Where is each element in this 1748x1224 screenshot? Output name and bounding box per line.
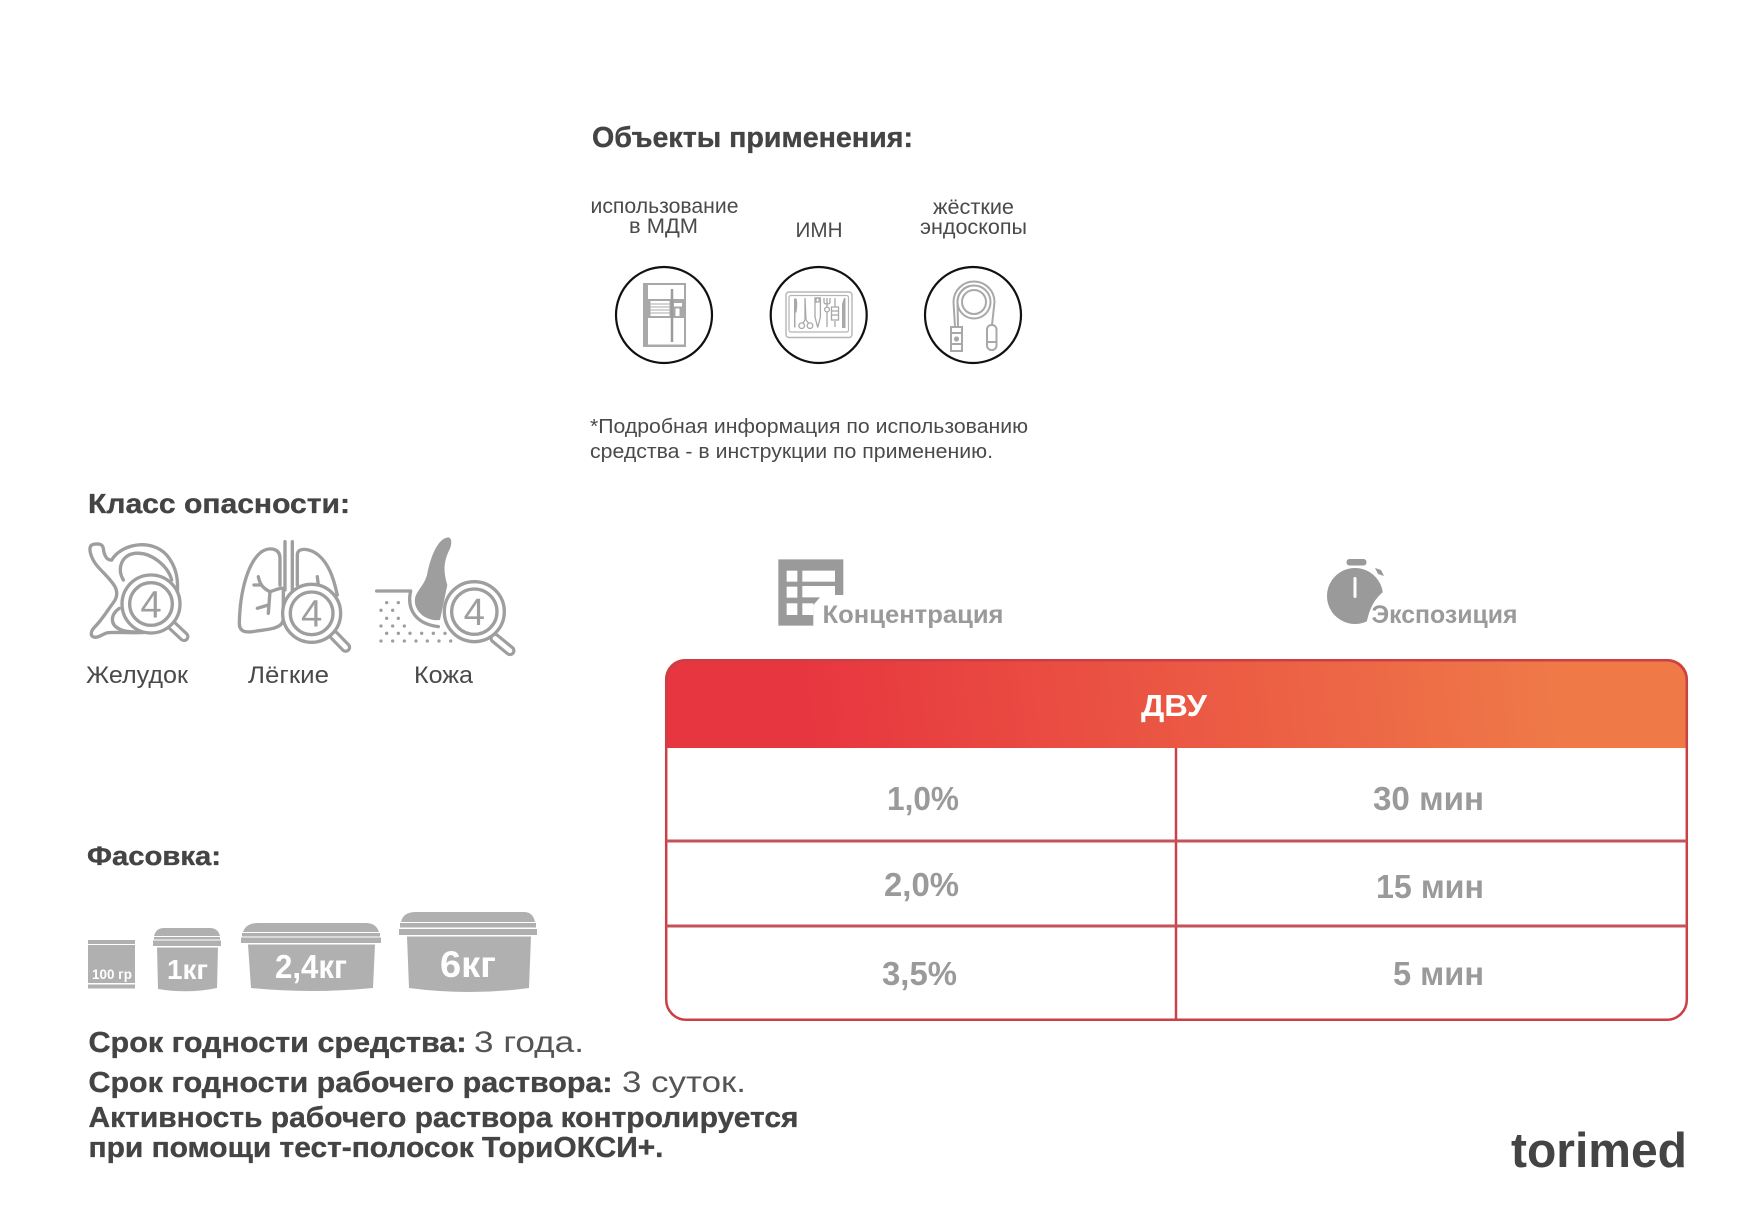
label: MDM use xyxy=(590,195,738,238)
panel: objects of application xyxy=(590,122,1028,463)
icon: lungs with magnifier class 4: 4 xyxy=(301,593,322,636)
text: working solution shelf life: 3 суток. xyxy=(622,1066,746,1099)
footnote: средства - в инструкции по применению. xyxy=(590,440,993,463)
icon: sachet 100 g: 100 гр xyxy=(92,967,132,982)
table: concentration and exposure by DVU xyxy=(665,659,1688,1021)
label: MDM use: в МДМ xyxy=(629,215,698,238)
icon and label: exposure stopwatch xyxy=(1327,559,1518,629)
label: IMN: ИМН xyxy=(796,219,842,242)
icon: lungs with magnifier class 4 xyxy=(239,542,346,647)
label: MDM use: использование xyxy=(590,195,738,218)
text: working solution shelf life: Срок годности рабочего раствора: xyxy=(88,1067,612,1099)
row: 2.0% 15 min: 2,0% xyxy=(884,866,959,903)
text: activity control note: Активность рабочего раствора контролируется xyxy=(88,1102,798,1134)
label: stomach: Желудок xyxy=(86,662,189,689)
icon and label: exposure stopwatch: Экспозиция xyxy=(1372,601,1518,629)
icon: tub 6 kg xyxy=(399,912,537,992)
heading: packaging: Фасовка: xyxy=(87,841,221,871)
label: rigid endoscopes: эндоскопы xyxy=(920,216,1027,239)
row: 1.0% 30 min: 1,0% xyxy=(887,780,959,817)
icon: tub 6 kg: 6кг xyxy=(440,944,496,985)
icon and label: concentration xyxy=(778,559,1004,629)
label: rigid endoscopes: жёсткие xyxy=(933,196,1014,219)
icon: washer-disinfector cabinet xyxy=(616,267,712,363)
text block: shelf life and activity xyxy=(88,1026,798,1164)
icon: tub 2.4 kg xyxy=(241,923,381,991)
icon: tub 2.4 kg: 2,4кг xyxy=(275,948,347,985)
panel: hazard class xyxy=(86,488,510,689)
table frame and grid xyxy=(666,660,1687,1021)
row: 2.0% 15 min: 15 мин xyxy=(1376,868,1484,905)
text: product shelf life: Срок годности средства: xyxy=(88,1027,466,1059)
heading: hazard class: Класс опасности: xyxy=(88,488,350,519)
icon: rigid endoscope coil xyxy=(925,267,1021,363)
icon: skin with magnifier class 4: 4 xyxy=(464,591,485,634)
text: activity control note xyxy=(88,1102,798,1164)
icon: surgical instruments tray xyxy=(771,267,867,363)
table header: DVU: ДВУ xyxy=(1141,688,1208,723)
text: activity control note: при помощи тест-полосок ТориОКСИ+. xyxy=(88,1132,664,1164)
icon: stomach with magnifier class 4 xyxy=(90,544,184,637)
row: 2.0% 15 min xyxy=(884,866,1484,905)
panel: packaging xyxy=(87,841,537,992)
text: product shelf life: 3 года. xyxy=(474,1026,584,1059)
label: lungs: Лёгкие xyxy=(248,662,329,689)
row: 1.0% 30 min xyxy=(887,780,1484,817)
icon: skin with magnifier class 4 xyxy=(377,537,510,651)
row: 3.5% 5 min: 3,5% xyxy=(882,955,957,992)
icon: tub 1 kg xyxy=(153,928,221,991)
icon: tub 1 kg: 1кг xyxy=(167,954,208,985)
row: 3.5% 5 min xyxy=(882,955,1484,992)
footnote xyxy=(590,415,1028,463)
logo: torimed: torimed xyxy=(1511,1124,1687,1178)
row: 3.5% 5 min: 5 мин xyxy=(1393,955,1484,992)
row: 1.0% 30 min: 30 мин xyxy=(1373,780,1484,817)
heading: objects of application: Объекты применения: xyxy=(592,122,913,154)
table header: DVU xyxy=(665,659,1688,748)
label: skin: Кожа xyxy=(414,662,474,689)
footnote: *Подробная информация по использованию xyxy=(590,415,1028,438)
icon and label: concentration: Концентрация xyxy=(822,601,1004,629)
text: product shelf life xyxy=(88,1026,584,1059)
label: rigid endoscopes xyxy=(920,196,1027,239)
icon: sachet 100 g xyxy=(88,940,135,988)
icon: stomach with magnifier class 4: 4 xyxy=(140,583,162,626)
